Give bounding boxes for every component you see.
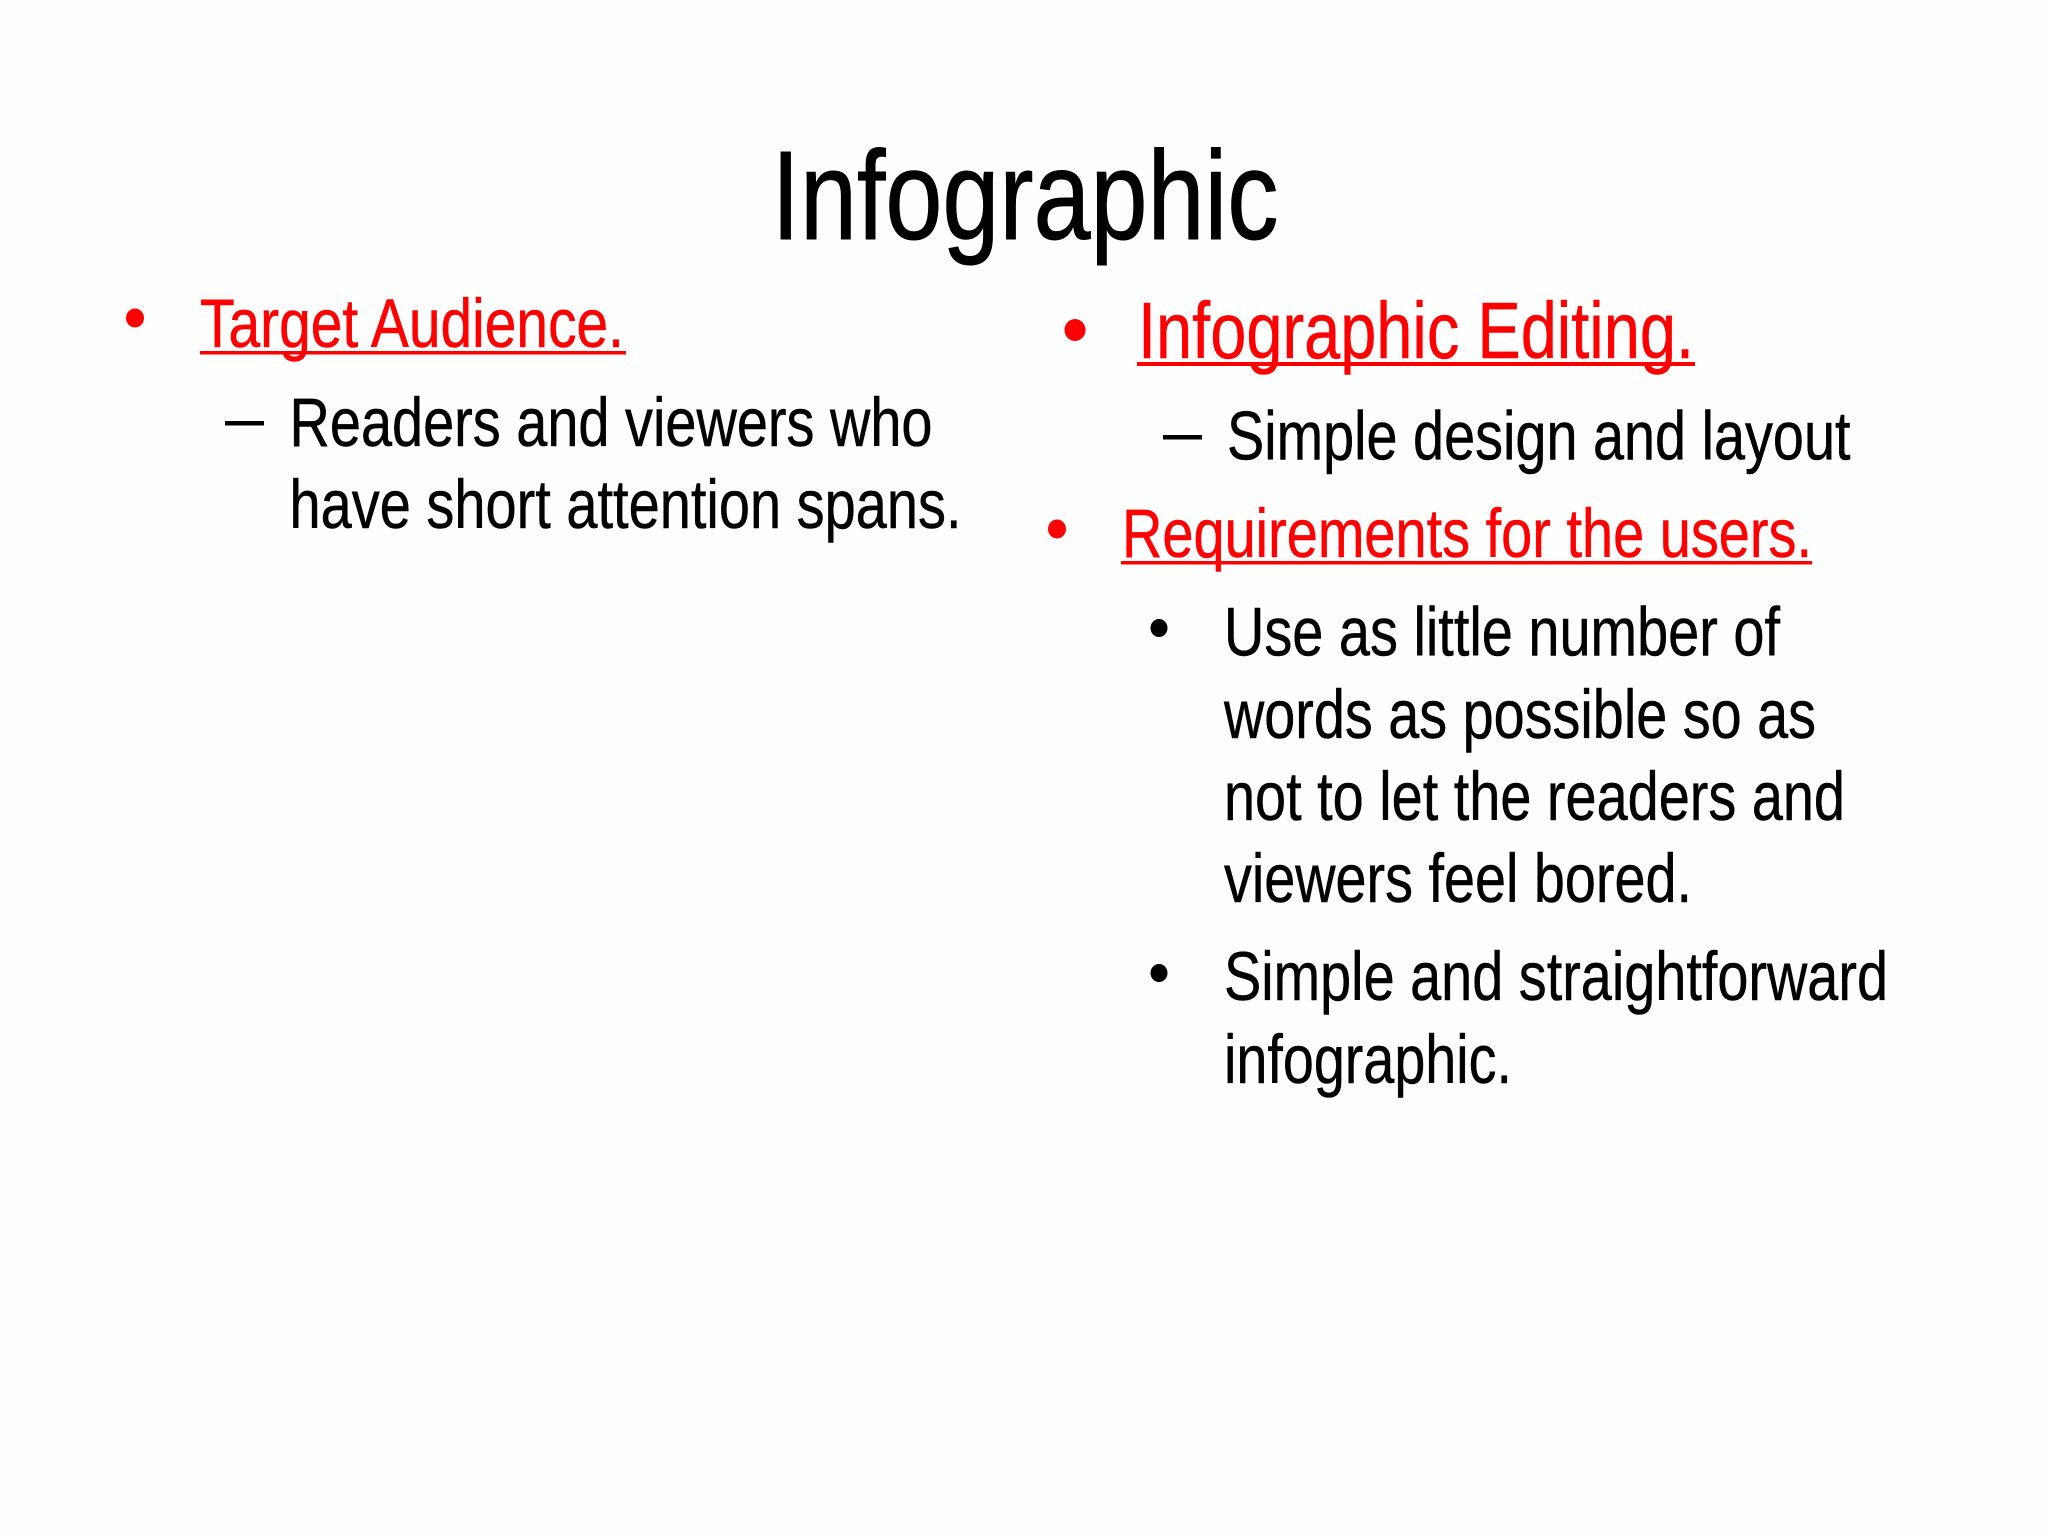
text block: readers and viewers: have short attention spans. [290,466,962,543]
heading: infographic editing: Infographic Editing. [1138,286,1694,375]
text block: word count requirement: Use as little number of [1224,594,1781,670]
panel: left column [126,285,962,543]
text block: readers and viewers [225,384,962,543]
title: Infographic [772,125,1278,266]
text block: simple infographic requirement: infographic. [1224,1021,1512,1098]
heading: target audience: Target Audience. [200,285,624,362]
text block: readers and viewers: Readers and viewers who [290,384,932,461]
text block: simple infographic requirement [1150,938,1888,1098]
text block: word count requirement: viewers feel bored. [1224,840,1692,917]
heading: requirements: Requirements for the users. [1122,495,1812,572]
text block: simple infographic requirement: Simple and straightforward [1224,938,1888,1015]
panel: right column [1048,286,1888,1098]
text block: word count requirement: not to let the readers and [1224,758,1845,835]
text block: word count requirement [1150,594,1845,917]
text block: word count requirement: words as possible so as [1223,676,1816,753]
text block: simple design: Simple design and layout [1227,398,1850,474]
